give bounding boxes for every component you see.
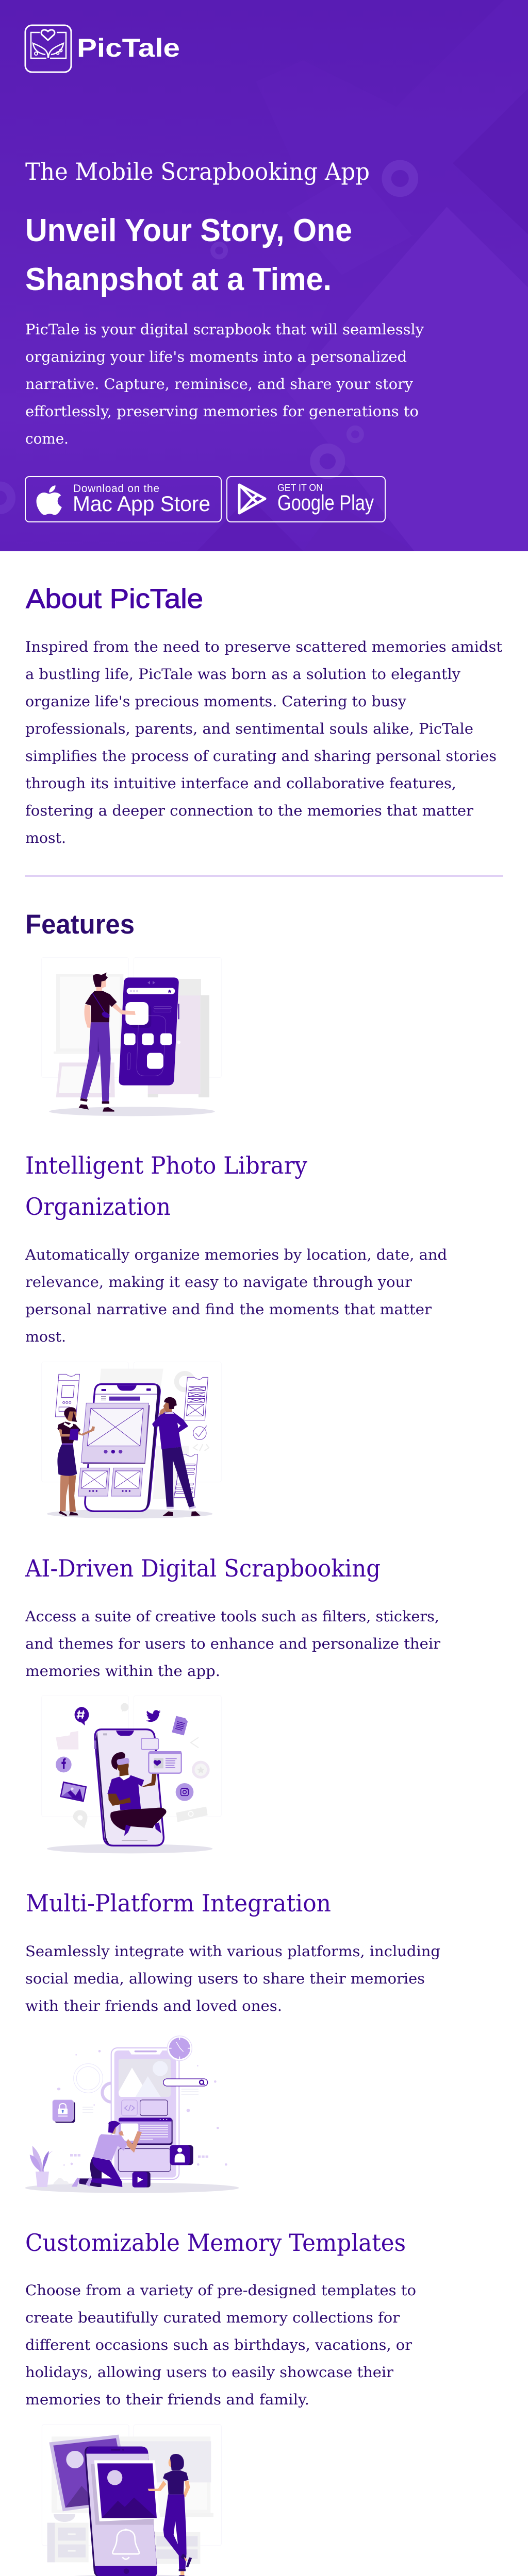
- logo mark: [25, 25, 71, 72]
- feature text: intelligent photo library: [25, 1246, 447, 1345]
- feature title: intelligent photo library: Organization: [25, 1193, 171, 1221]
- feature text: intelligent photo library: most.: [25, 1328, 66, 1345]
- hero headline: Shanpshot at a Time.: [25, 262, 332, 297]
- button: Mac App Store: [25, 477, 221, 522]
- feature text: intelligent photo library: personal narrative and find the moments that matter: [25, 1301, 432, 1318]
- feature section: multi-platform integration and templates illustration: [25, 1703, 440, 2257]
- about paragraph: professionals, parents, and sentimental souls alike, PicTale: [25, 720, 473, 737]
- hero headline: Unveil Your Story, One: [25, 213, 352, 248]
- illustration: person in phone with social icons: [42, 1696, 221, 1853]
- feature text: memory templates: memories to their friends and family.: [25, 2391, 309, 2408]
- feature text: AI-driven: Access a suite of creative tools such as filters, stickers,: [25, 1608, 439, 1625]
- feature text: AI-driven: and themes for users to enhance and personalize their: [25, 1635, 441, 1652]
- button: Google Play: GET IT ON: [277, 483, 323, 494]
- feature text: intelligent photo library: relevance, making it easy to navigate through your: [25, 1274, 412, 1291]
- feature text: multi-platform: social media, allowing users to share their memories: [25, 1970, 425, 1987]
- feature text: memory templates: different occasions such as birthdays, vacations, or: [25, 2336, 412, 2353]
- hero intro paragraph: [25, 321, 424, 447]
- about paragraph: [25, 638, 503, 846]
- feature title: multi-platform: Multi-Platform Integration: [26, 1889, 331, 1917]
- illustration: two people reviewing wireframes: [42, 1362, 221, 1518]
- hero panel: [0, 0, 528, 551]
- feature text: memory templates: [25, 2282, 416, 2408]
- feature text: multi-platform: with their friends and loved ones.: [25, 1997, 282, 2014]
- about heading: About PicTale: [26, 584, 203, 614]
- button: Google Play: [227, 477, 385, 522]
- about paragraph: through its intuitive interface and collaborative features,: [25, 775, 456, 792]
- button: Mac App Store: Mac App Store: [73, 492, 210, 516]
- hero intro paragraph: narrative. Capture, reminisce, and share your story: [25, 376, 413, 393]
- about paragraph: a bustling life, PicTale was born as a solution to elegantly: [25, 666, 460, 683]
- about paragraph: Inspired from the need to preserve scattered memories amidst: [25, 638, 503, 655]
- feature text: AI-driven: [25, 1608, 441, 1680]
- button: Google Play: Google Play: [277, 490, 374, 515]
- feature text: intelligent photo library: Automatically organize memories by location, date, and: [25, 1246, 447, 1263]
- feature title: AI-driven: AI-Driven Digital Scrapbooking: [25, 1554, 381, 1582]
- feature text: memory templates: Choose from a variety of pre-designed templates to: [25, 2282, 416, 2299]
- about paragraph: most.: [25, 829, 66, 846]
- icon: play triangle: [239, 485, 265, 513]
- feature text: multi-platform: Seamlessly integrate with various platforms, including: [25, 1943, 440, 1960]
- hero intro paragraph: organizing your life's moments into a personalized: [25, 348, 407, 365]
- hero intro paragraph: PicTale is your digital scrapbook that will seamlessly: [25, 321, 424, 338]
- feature text: multi-platform: [25, 1943, 440, 2014]
- features heading: Features: [25, 909, 135, 940]
- logo wordmark: PicTale: [77, 33, 180, 62]
- icon: apple: [37, 485, 62, 515]
- about paragraph: simplifies the process of curating and sharing personal stories: [25, 748, 497, 765]
- button: Mac App Store: Download on the: [73, 483, 159, 495]
- hero intro paragraph: effortlessly, preserving memories for generations to: [25, 403, 419, 420]
- feature text: AI-driven: memories within the app.: [25, 1663, 220, 1680]
- illustration: kneeling man with lavender phone: [25, 2036, 239, 2193]
- hero subtitle: The Mobile Scrapbooking App: [25, 158, 370, 185]
- hero background with diamonds and rings: [0, 0, 528, 551]
- illustration: woman with phone and notification bell: [42, 2425, 221, 2576]
- feature title: memory templates: Customizable Memory Templates: [25, 2229, 406, 2257]
- about paragraph: organize life's precious moments. Catering to busy: [25, 693, 406, 710]
- feature section: intelligent photo library and wireframe illustration: [25, 1151, 447, 1680]
- feature text: memory templates: holidays, allowing users to easily showcase their: [25, 2364, 394, 2381]
- about paragraph: fostering a deeper connection to the memories that matter: [25, 802, 474, 819]
- hero headline: [25, 213, 352, 297]
- feature title: intelligent photo library: [25, 1151, 307, 1221]
- feature text: memory templates: create beautifully curated memory collections for: [25, 2309, 400, 2326]
- hero intro paragraph: come.: [25, 430, 69, 447]
- feature section: memory templates text and flashback: [25, 2282, 416, 2576]
- feature title: intelligent photo library: Intelligent Photo Library: [25, 1151, 307, 1179]
- illustration: man tapping oversized phone: [42, 957, 221, 1116]
- about and first feature illustration section: [25, 584, 503, 1116]
